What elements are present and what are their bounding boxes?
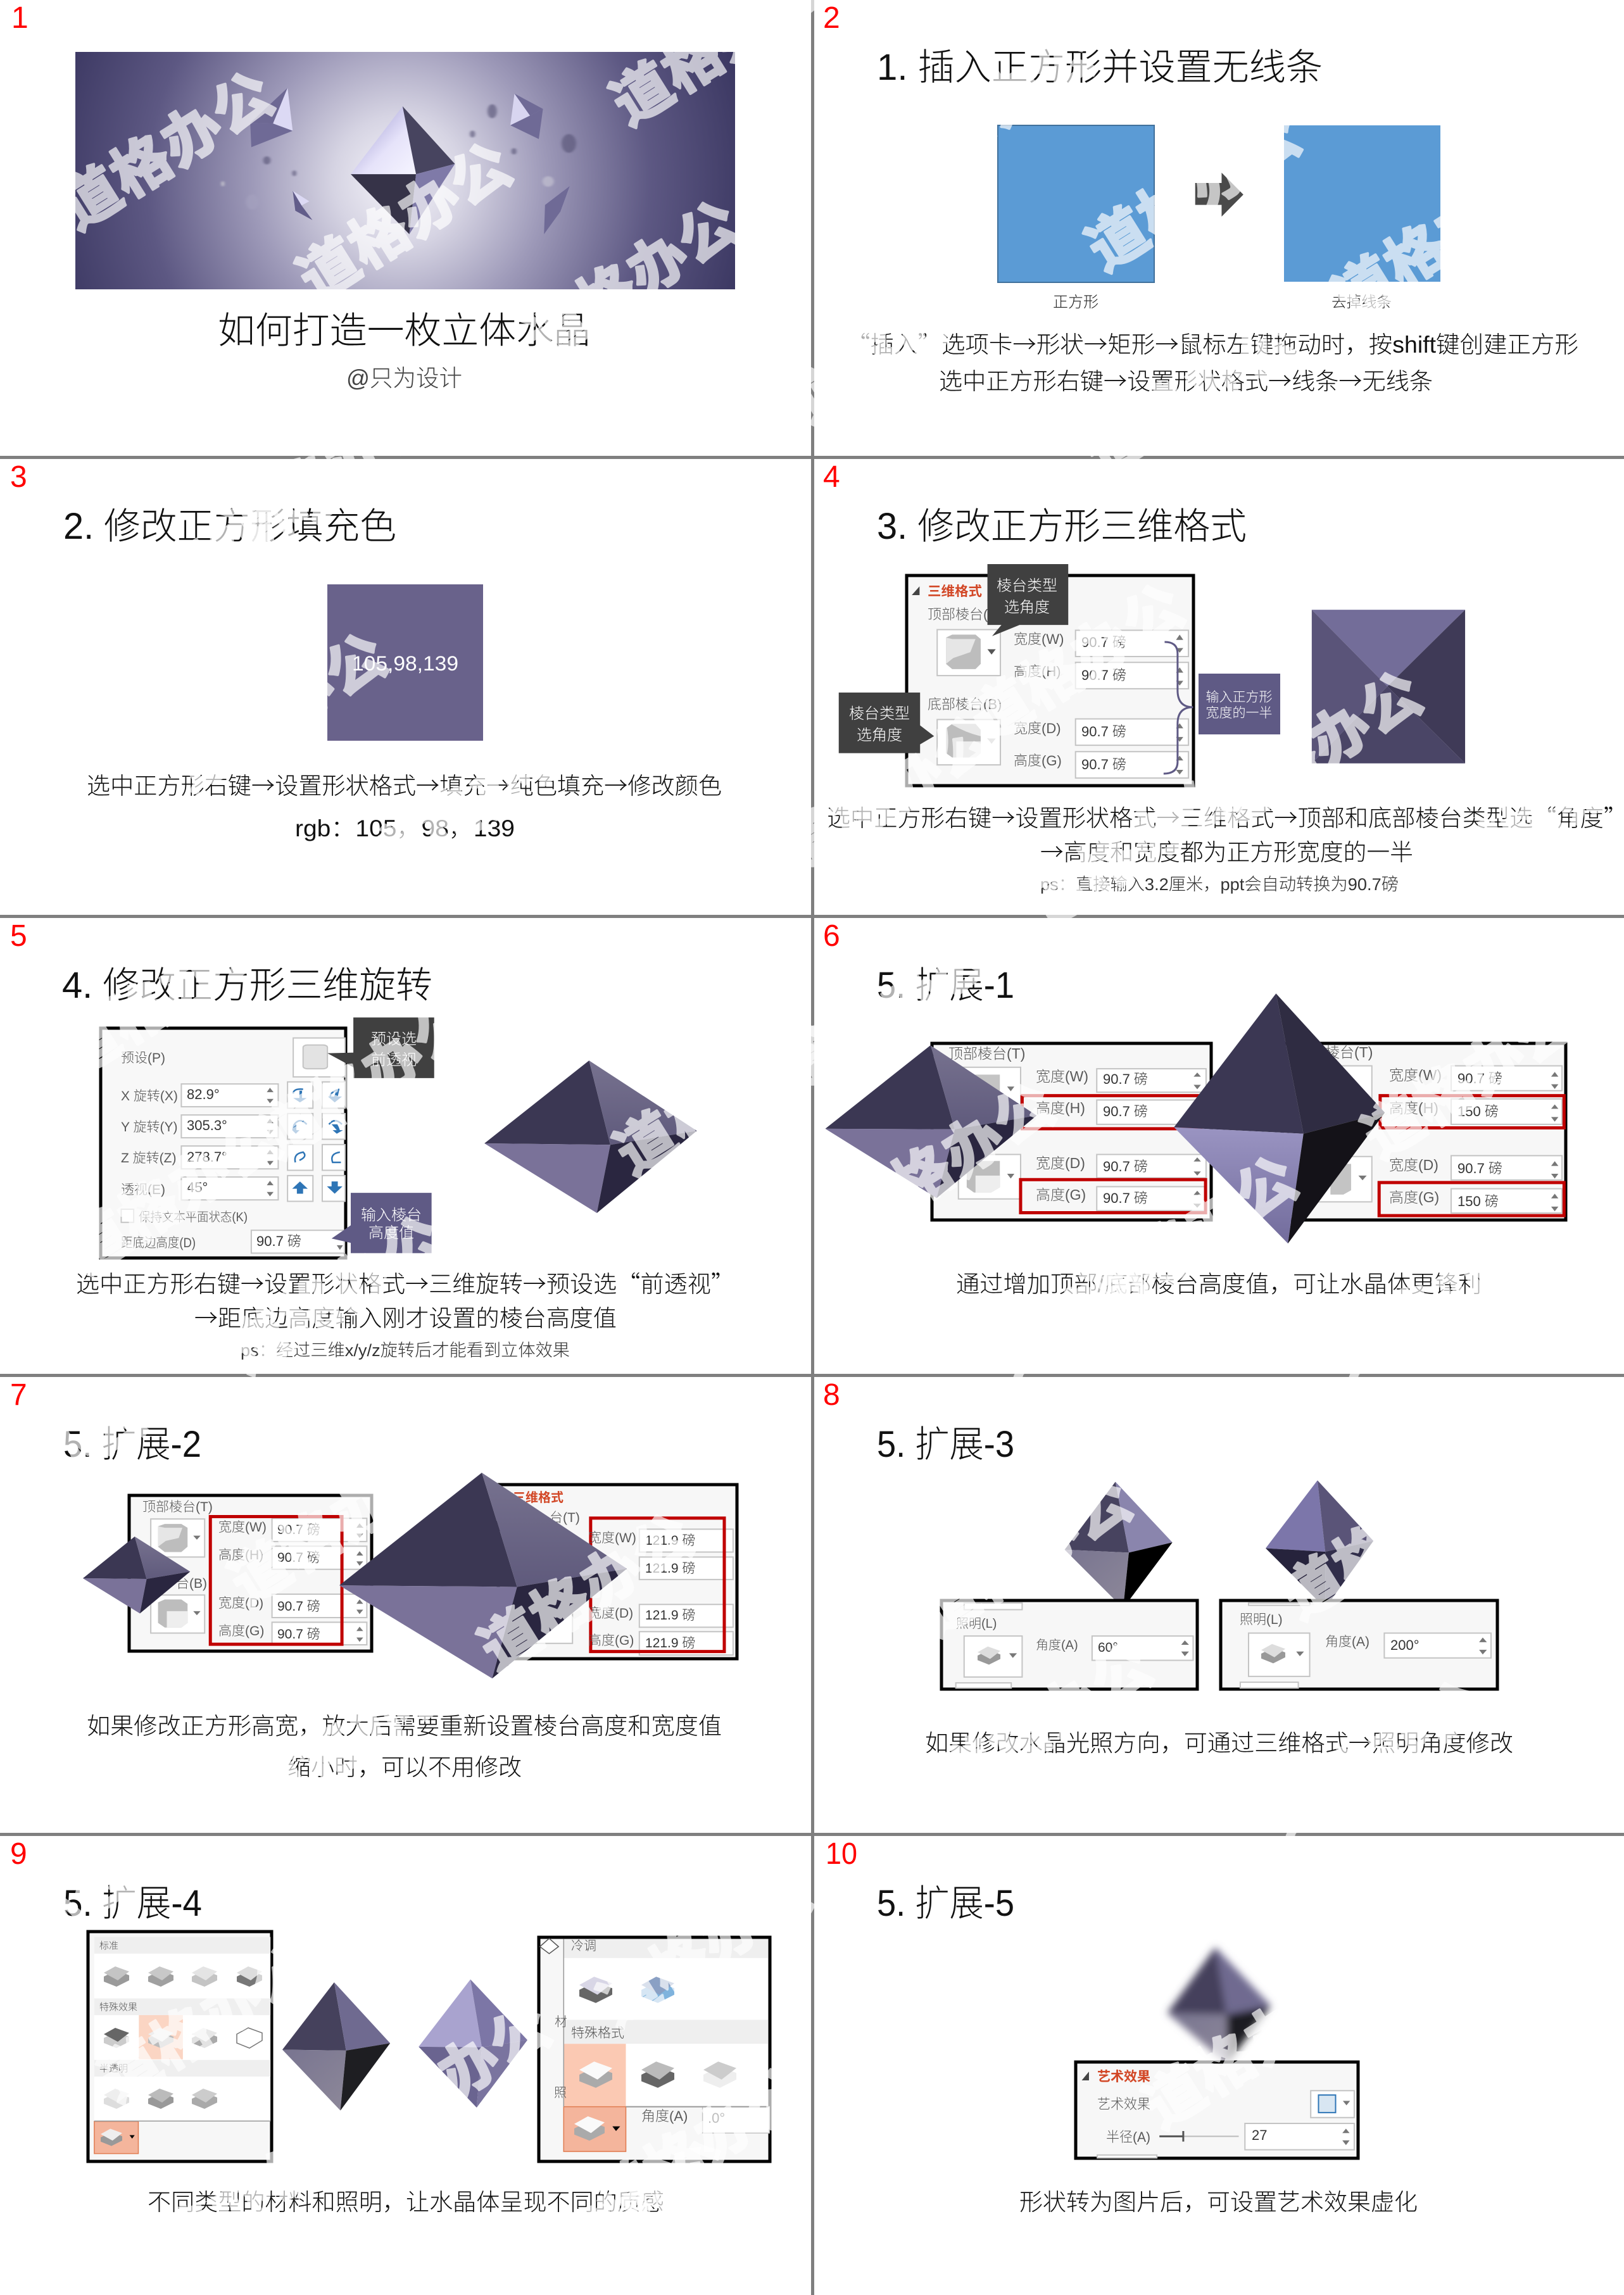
crystal [484, 1060, 697, 1213]
panel: artistic effects: 艺术效果 [1097, 2070, 1150, 2084]
panel: rotation dialog: 90.7 磅 [256, 1233, 301, 1249]
panel: enlarged values: 121.9 磅 [645, 1533, 695, 1548]
watermark layer: 道格办公 [163, 622, 399, 803]
callout: bottom bevel: 棱台类型 [849, 705, 910, 722]
panel: lighting 60: 照明(L) [956, 1617, 997, 1631]
heading: 5. 扩展-5 [877, 1883, 1014, 1924]
heading: 4. 修改正方形三维旋转 [62, 965, 432, 1006]
panel: material gallery: 半透明 [99, 2063, 128, 2074]
watermark layer: 道格办公 [238, 1648, 474, 1829]
instructions: 不同类型的材料和照明，让水晶体呈现不同的质感 [148, 2189, 664, 2215]
panel: rotation dialog: 82.9° [187, 1086, 220, 1102]
slide 8: extension 3 [823, 1378, 1513, 1758]
watermark layer: 道格办公 [1321, 1211, 1557, 1392]
panel: lighting gallery: 材 [555, 2015, 567, 2029]
instructions [847, 325, 1578, 396]
number 3: 3 [10, 460, 27, 494]
panel: lighting 60: 60° [1098, 1640, 1118, 1655]
panel: material gallery: 标准 [99, 1940, 118, 1951]
panel: bevel values 90.7: 90.7 磅 [1103, 1159, 1148, 1174]
watermark layer: 道格办公 [1323, 150, 1559, 331]
number 5: 5 [10, 919, 27, 953]
callout: top bevel: 棱台类型 [997, 577, 1057, 594]
panel: lighting 60: 角度(A) [1036, 1638, 1078, 1652]
watermark layer: 道格办公 [770, 705, 1006, 886]
watermark layer: 道格办公 [219, 1205, 455, 1386]
callout: top bevel [988, 564, 1068, 636]
panel: small values: 高度(G) [218, 1624, 264, 1638]
panel: lighting gallery: 冷调 [571, 1939, 596, 1953]
panel: enlarged values: 121.9 磅 [645, 1561, 695, 1576]
watermark layer: 道格办公 [1272, 1450, 1508, 1632]
panel: artistic effects: 27 [1252, 2127, 1267, 2143]
panel: small values: 90.7 磅 [277, 1523, 320, 1537]
instructions [827, 799, 1624, 894]
instructions: 选中正方形右键→设置形状格式→三维格式→顶部和底部棱台类型选“角度” [827, 799, 1624, 833]
panel: 3D format dialog: 90.7 磅 [1081, 634, 1126, 650]
crystal: original [825, 1045, 1036, 1198]
callout: half width [1199, 674, 1280, 734]
crystal: metallic [282, 1982, 390, 2111]
panel: 3D format dialog: 底部棱台(B) [928, 696, 1002, 712]
instructions: 通过增加顶部/底部棱台高度值，可让水晶体更锋利 [956, 1271, 1482, 1297]
panel: bevel values 90.7: 宽度(D) [1036, 1155, 1085, 1171]
number 6: 6 [823, 919, 840, 953]
panel: lighting gallery [539, 1937, 770, 2161]
panel: bevel values 150: 150 磅 [1457, 1103, 1499, 1119]
panel: bevel values 150: 90.7 磅 [1457, 1160, 1502, 1176]
coloured square [327, 584, 483, 741]
panel: 3D format dialog: 三维格式 [928, 584, 982, 599]
slide 6: extension 1 [823, 919, 1566, 1297]
panel: bevel values 150: 高度(H) [1389, 1100, 1438, 1116]
number 2: 2 [823, 1, 840, 35]
panel: artistic effects: 半径(A) [1106, 2129, 1150, 2145]
panel: rotation dialog: 透视(E) [121, 1183, 165, 1197]
watermark layer: 道格办公 [287, 132, 524, 313]
callout: bottom bevel [839, 693, 934, 753]
panel: bevel values 150: 90.7 磅 [1457, 1071, 1502, 1086]
panel: small values: 台(B) [176, 1576, 207, 1591]
panel: 3D format dialog: 90.7 磅 [1081, 724, 1126, 739]
panel: bevel values 150: 高度(G) [1389, 1189, 1439, 1205]
instructions: ps：经过三维x/y/z旋转后才能看到立体效果 [241, 1341, 570, 1360]
heading: 5. 扩展-4 [63, 1883, 202, 1924]
panel: 3D format dialog: 宽度(W) [1014, 631, 1064, 647]
panel: bevel values 90.7: 高度(G) [1036, 1186, 1086, 1203]
panel: enlarged values [498, 1485, 737, 1659]
heading: 5. 扩展-3 [877, 1424, 1014, 1465]
watermark layer: 道格办公 [469, 1502, 705, 1683]
slide 10: extension 5 [826, 1837, 1418, 2215]
panel: bevel values 90.7: 顶部棱台(T) [948, 1045, 1025, 1062]
watermark layer: 道格办公 [1198, 660, 1434, 841]
slide 2: insert square [823, 1, 1578, 396]
instructions [87, 767, 722, 841]
panel: bevel values 90.7: 90.7 磅 [1103, 1190, 1148, 1206]
instructions [76, 1265, 734, 1360]
callout: preset: 预设选 [371, 1031, 417, 1048]
watermark layer: 道格办公 [327, 1993, 563, 2174]
panel: rotation dialog: 保持文本平面状态(K) [139, 1210, 248, 1224]
watermark layer: 道格办公 [1076, 102, 1312, 283]
watermark layer: 道格办公 [1352, 990, 1589, 1171]
watermark layer: 道格办公 [49, 61, 286, 242]
crystal: sharpened [1174, 993, 1385, 1243]
callout: height: 输入棱台 [361, 1207, 422, 1224]
panel: bevel values 150: 150 磅 [1457, 1193, 1499, 1209]
panel: lighting 200: 照明(L) [1240, 1613, 1283, 1627]
title: 如何打造一枚立体水晶 [218, 310, 591, 351]
number 10: 10 [826, 1837, 857, 1871]
panel: enlarged values: 宽度(W) [588, 1531, 636, 1545]
callout: top bevel: 选角度 [1004, 599, 1050, 616]
panel: lighting 200 [1221, 1600, 1497, 1689]
watermark layer: 道格办公 [130, 451, 367, 632]
panel: rotation dialog: 预设(P) [121, 1051, 165, 1066]
instructions: rgb：105，98，139 [295, 815, 515, 841]
watermark layer: 道格办公 [219, 1436, 455, 1617]
panel: lighting 200: 角度(A) [1325, 1635, 1369, 1649]
slide 7: extension 2 [10, 1378, 737, 1780]
label: no outline: 去掉线条 [1331, 294, 1392, 311]
cover image: crystal on gradient [75, 52, 735, 289]
panel: artistic effects [1076, 2062, 1358, 2158]
panel: small values: 高度(H) [218, 1548, 263, 1562]
watermark layer: 道格办公 [358, 712, 595, 893]
instructions: →距底边高度输入刚才设置的棱台高度值 [194, 1299, 617, 1333]
heading: 5. 扩展-2 [63, 1424, 201, 1465]
panel: rotation dialog: 305.3° [187, 1117, 227, 1133]
panel: rotation dialog: 距底边高度(D) [121, 1236, 196, 1250]
panel: bevel values 90.7: 高度(H) [1036, 1100, 1085, 1116]
panel: artistic effects: 艺术效果 [1097, 2096, 1150, 2112]
callout: half width: 宽度的一半 [1205, 706, 1273, 720]
watermark layer: 道格办公 [58, 1105, 294, 1286]
heading: 2. 修改正方形填充色 [63, 506, 396, 547]
instructions: ps：直接输入3.2厘米，ppt会自动转换为90.7磅 [1040, 875, 1399, 894]
brace [1164, 642, 1193, 774]
watermark layer: 道格办公 [960, 573, 1196, 754]
watermark layer: 道格办公 [985, 1211, 1221, 1392]
panel: 3D format dialog: 90.7 磅 [1081, 667, 1126, 683]
beveled square [1312, 610, 1465, 764]
panel: material gallery [88, 1932, 272, 2161]
panel: lighting gallery: 照 [554, 2086, 567, 2100]
watermark layer: 道格办公 [213, 382, 449, 563]
crystal: blurred [1168, 1947, 1271, 2065]
slide 4: 3D format [823, 460, 1624, 894]
panel: rotation dialog: 45° [187, 1179, 208, 1195]
instructions: →高度和宽度都为正方形宽度的一半 [1040, 833, 1413, 867]
instructions: 选中正方形右键→设置形状格式→填充→纯色填充→修改颜色 [87, 767, 722, 801]
panel: small values: 90.7 磅 [277, 1599, 320, 1614]
watermark layer: 道格办公 [1073, 1145, 1309, 1326]
instructions: 形状转为图片后，可设置艺术效果虚化 [1019, 2189, 1418, 2215]
watermark layer: 道格办公 [831, 1071, 1067, 1252]
watermark layer: 道格办公 [515, 190, 752, 371]
label: square: 正方形 [1053, 294, 1098, 311]
panel: enlarged values: 121.9 磅 [645, 1608, 695, 1623]
instructions: 选中正方形右键→设置形状格式→线条→无线条 [939, 362, 1433, 396]
number 9: 9 [10, 1837, 27, 1871]
panel: bevel values 90.7: 90.7 磅 [1103, 1103, 1148, 1119]
number 4: 4 [823, 460, 840, 494]
panel: enlarged values: 三维格式 [513, 1490, 563, 1505]
watermark layer: 道格办公 [251, 990, 487, 1171]
panel: small values: 90.7 磅 [277, 1627, 320, 1642]
panel: bevel values 150: 宽度(W) [1389, 1067, 1442, 1083]
number 7: 7 [10, 1378, 27, 1412]
panel: 3D format dialog: 高度(H) [1014, 663, 1061, 679]
crystal: small [83, 1537, 190, 1614]
instructions: 缩小时，可以不用修改 [287, 1754, 522, 1780]
panel: enlarged values: 高度(G) [588, 1633, 634, 1648]
panel: enlarged values: 台(T) [550, 1511, 580, 1525]
instructions: 选中正方形右键→设置形状格式→三维旋转→预设选“前透视” [76, 1265, 734, 1299]
panel: enlarged values: 121.9 磅 [645, 1636, 695, 1651]
panel: lighting gallery: 角度(A) [641, 2108, 688, 2124]
panel: rotation dialog: Z 旋转(Z) [121, 1151, 176, 1166]
arrow [1195, 173, 1243, 217]
number 8: 8 [823, 1378, 840, 1412]
instructions: 如果修改正方形高宽，放大后需要重新设置棱台高度和宽度值 [87, 1713, 722, 1739]
instructions [87, 1713, 722, 1780]
panel: lighting 60 [941, 1600, 1197, 1689]
callout: preset [327, 1017, 434, 1078]
panel: lighting 200: 200° [1390, 1637, 1419, 1653]
watermark layer: 道格办公 [583, 2056, 819, 2237]
panel: 3D format dialog: 顶部棱台(T) [928, 607, 1001, 622]
panel: 3D format dialog [907, 575, 1193, 786]
watermark layer: 道格办公 [48, 907, 284, 1088]
panel: enlarged values: 宽度(D) [588, 1606, 633, 1621]
crystal: light 200 [1266, 1480, 1373, 1608]
panel: rotation dialog: 278.7° [187, 1149, 227, 1165]
watermark layer: 道格办公 [907, 1467, 1143, 1648]
panel: bevel values 150: 棱台(T) [1325, 1044, 1373, 1060]
panel: bevel values 150 [1282, 1043, 1566, 1220]
panel: 3D format dialog: 高度(G) [1014, 753, 1062, 769]
author: @只为设计 [346, 365, 462, 391]
slide 3: fill colour [10, 460, 722, 841]
crystal: enlarged [339, 1473, 627, 1678]
callout: bottom bevel: 选角度 [857, 727, 902, 744]
heading: 3. 修改正方形三维格式 [877, 506, 1247, 547]
panel: lighting gallery: 特殊格式 [571, 2026, 624, 2040]
crystal: light 60 [1065, 1482, 1173, 1608]
panel: small values: 宽度(W) [218, 1520, 267, 1535]
watermark layer: 道格办公 [783, 255, 1019, 436]
watermark layer: 道格办公 [605, 1006, 841, 1187]
callout: height: 高度值 [368, 1224, 414, 1242]
callout: half width: 输入正方形 [1205, 690, 1273, 705]
slide 5: 3D rotation [10, 919, 734, 1360]
panel: lighting gallery: .0° [708, 2110, 725, 2126]
watermark layer: 道格办公 [871, 21, 1107, 202]
colour value: 105,98,139 [352, 652, 458, 675]
watermark layer: 道格办公 [1074, 306, 1310, 487]
heading: 5. 扩展-1 [877, 965, 1014, 1006]
instructions: 如果修改水晶光照方向，可通过三维格式→照明角度修改 [925, 1724, 1513, 1758]
watermark layer: 道格办公 [1017, 758, 1253, 940]
crystal: soft [419, 1980, 527, 2108]
panel: bevel values 90.7 [932, 1043, 1211, 1220]
panel: rotation dialog: Y 旋转(Y) [121, 1120, 177, 1135]
square with outline [998, 125, 1154, 282]
watermark layer: 道格办公 [588, 1858, 824, 2039]
watermark layer: 道格办公 [1257, 1670, 1494, 1851]
panel: bevel values 90.7: 90.7 磅 [1103, 1071, 1148, 1087]
panel: rotation dialog: X 旋转(X) [121, 1089, 178, 1103]
watermark layer: 道格办公 [89, 1933, 325, 2114]
panel: bevel values 90.7: 宽度(W) [1036, 1068, 1088, 1085]
number 1: 1 [11, 1, 28, 35]
square without outline [1284, 125, 1440, 282]
callout: preset: 前透视 [371, 1052, 417, 1069]
panel: small values: 90.7 磅 [277, 1550, 320, 1565]
heading: 1. 插入正方形并设置无线条 [877, 47, 1323, 88]
watermark layer: 道格办公 [1133, 1959, 1369, 2141]
panel: 3D format dialog: 宽度(D) [1014, 720, 1061, 736]
panel: 3D format dialog: 90.7 磅 [1081, 757, 1126, 772]
callout: height [332, 1193, 432, 1253]
panel: small values: 顶部棱台(T) [142, 1500, 213, 1514]
panel: material gallery: 特殊效果 [99, 2002, 137, 2013]
panel: bevel values 150: 宽度(D) [1389, 1157, 1438, 1173]
slide 1: cover [11, 1, 735, 391]
instructions: “插入”选项卡→形状→矩形→鼠标左键拖动时，按shift键创建正方形 [847, 325, 1578, 360]
watermark layer: 道格办公 [928, 1632, 1164, 1813]
panel: small values [129, 1495, 372, 1651]
panel: rotation dialog [101, 1028, 346, 1258]
slide 9: extension 4 [10, 1837, 770, 2215]
panel: small values: 宽度(D) [218, 1596, 263, 1611]
watermark layer: 道格办公 [770, 923, 1006, 1104]
